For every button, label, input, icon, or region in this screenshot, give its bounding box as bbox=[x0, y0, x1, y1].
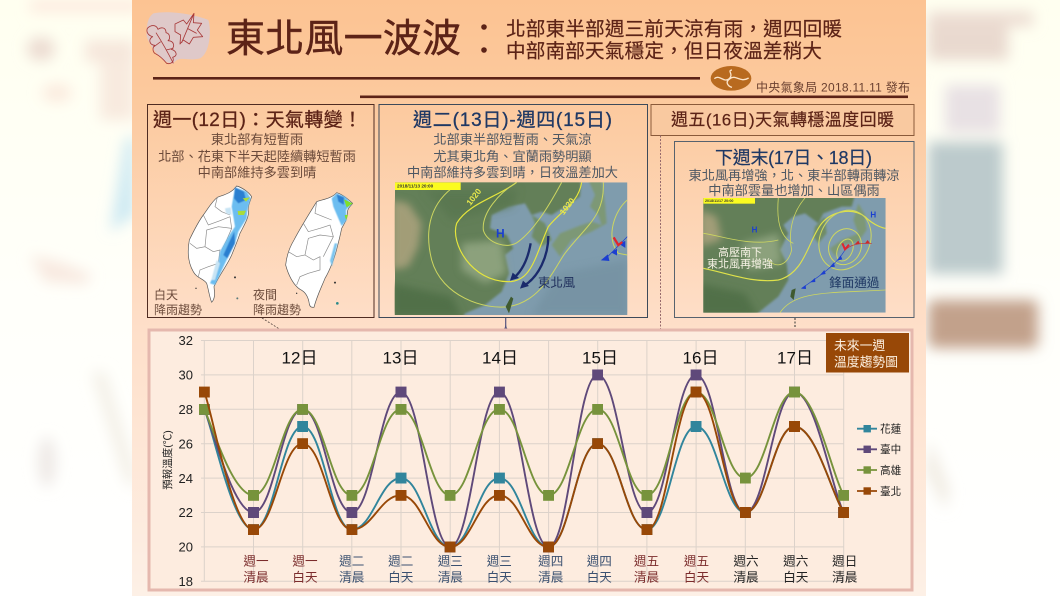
x axis labels: 清晨 bbox=[538, 570, 564, 584]
x axis labels: 清晨 bbox=[634, 570, 660, 584]
panel: next weekend bbox=[674, 142, 914, 327]
y axis labels: 28 bbox=[179, 402, 193, 417]
icon: leaves bbox=[147, 12, 210, 64]
summary bullets: 北部東半部週三前天涼有雨，週四回暖 bbox=[506, 18, 842, 40]
x axis labels: 週一 bbox=[243, 554, 269, 568]
x axis labels: 週四 bbox=[538, 554, 563, 568]
legend bbox=[857, 422, 902, 498]
x axis labels: 清晨 bbox=[733, 570, 759, 584]
x axis labels: 週五 bbox=[634, 554, 659, 568]
connector: Monday to chart bbox=[262, 318, 300, 342]
label: high pressure moving south: 高壓南下 bbox=[718, 245, 762, 259]
x axis labels: 清晨 bbox=[438, 570, 463, 584]
chart title box: 未來一週 bbox=[834, 338, 885, 353]
label: daytime rain: 降雨趨勢 bbox=[154, 302, 202, 317]
x axis labels: 白天 bbox=[487, 570, 512, 584]
heading: Monday: 週一(12日)：天氣轉變！ bbox=[153, 109, 362, 131]
x axis labels: 週日 bbox=[832, 554, 857, 568]
legend: 臺北 bbox=[880, 485, 901, 498]
legend: 高雄 bbox=[880, 464, 902, 477]
grid bbox=[201, 340, 844, 581]
date labels: 17日 bbox=[777, 348, 813, 368]
date labels: 15日 bbox=[582, 348, 618, 368]
label: night rain bbox=[253, 287, 301, 317]
chart title box bbox=[826, 333, 909, 372]
text: midweek forecast: 中南部維持多雲到晴，日夜溫差加大 bbox=[407, 165, 618, 180]
connector: Friday to chart bbox=[660, 136, 680, 358]
header rules bbox=[153, 77, 908, 98]
summary bullets: 中部南部天氣穩定，但日夜溫差稍大 bbox=[506, 40, 822, 62]
label: high pressure moving south: 東北風再增強 bbox=[707, 256, 773, 270]
text: Monday forecast: 中南部維持多雲到晴 bbox=[198, 165, 316, 180]
map: weather map Nov 13: 1020 bbox=[464, 186, 484, 207]
y axis labels: 26 bbox=[179, 436, 193, 452]
map: weather map Nov 13 bbox=[394, 182, 628, 315]
label: northeast wind: 東北風 bbox=[538, 276, 575, 290]
legend: 臺中 bbox=[880, 443, 901, 456]
map: weather map Nov 17: H bbox=[870, 210, 876, 219]
label: daytime rain: 白天 bbox=[154, 287, 178, 302]
x axis labels: 白天 bbox=[292, 570, 318, 584]
x axis labels: 週二 bbox=[388, 554, 413, 568]
x axis labels: 白天 bbox=[388, 570, 414, 584]
x axis labels: 週一 bbox=[292, 554, 318, 568]
label: front passing: 鋒面通過 bbox=[829, 275, 880, 290]
icon: weather bureau logo bbox=[711, 66, 751, 91]
y axis labels bbox=[179, 333, 193, 589]
y axis title: 預報溫度(℃) bbox=[161, 430, 174, 490]
text: midweek forecast bbox=[407, 132, 618, 180]
x axis labels: 白天 bbox=[587, 570, 612, 584]
date labels: 14日 bbox=[482, 348, 518, 368]
x axis labels: 清晨 bbox=[339, 570, 365, 584]
text: weekend forecast bbox=[688, 168, 900, 198]
legend: 花蓮 bbox=[880, 422, 902, 436]
map: weather map Nov 13: 2018/11/13 20:00 bbox=[397, 184, 434, 189]
text: Monday forecast: 東北部有短暫雨 bbox=[211, 132, 303, 147]
text: midweek forecast: 尤其東北角、宜蘭雨勢明顯 bbox=[433, 149, 592, 164]
credit: 中央氣象局 2018.11.11 發布 bbox=[756, 80, 910, 94]
heading: Tuesday to Thursday: 週二(13日)-週四(15日) bbox=[413, 109, 612, 131]
label: daytime rain bbox=[154, 287, 202, 317]
header: Friday: 週五(16日)天氣轉穩溫度回暖 bbox=[671, 110, 894, 130]
x axis labels: 白天 bbox=[783, 570, 809, 584]
y axis labels: 24 bbox=[179, 471, 193, 486]
y axis labels: 30 bbox=[179, 368, 193, 382]
map: weather map Nov 17: H bbox=[752, 225, 758, 234]
line: Hualien bbox=[204, 409, 844, 547]
x axis labels: 週六 bbox=[783, 554, 808, 568]
header: Friday bbox=[651, 104, 914, 136]
date labels: 16日 bbox=[683, 348, 718, 368]
heading: next weekend: 下週末(17日、18日) bbox=[715, 148, 872, 168]
y axis labels: 32 bbox=[179, 333, 193, 348]
page panel bbox=[132, 0, 926, 596]
x axis labels: 週五 bbox=[684, 554, 709, 568]
date labels: 12日 bbox=[282, 348, 317, 368]
map: weather map Nov 13: H bbox=[496, 227, 505, 241]
map: daytime rain over Taiwan bbox=[188, 186, 252, 302]
line: Taichung bbox=[204, 375, 844, 547]
date labels: 13日 bbox=[383, 348, 418, 368]
text: weekend forecast: 中南部雲量也增加、山區偶雨 bbox=[708, 183, 880, 198]
line: Kaohsiung bbox=[204, 392, 844, 495]
y axis labels: 18 bbox=[179, 574, 193, 589]
y axis labels: 22 bbox=[179, 505, 193, 520]
connector: midweek bracket bbox=[385, 318, 626, 341]
text: midweek forecast: 北部東半部短暫雨、天氣涼 bbox=[433, 132, 592, 147]
panel: temperature chart bbox=[149, 330, 912, 590]
label: high pressure moving south bbox=[707, 245, 773, 270]
x axis labels: 週三 bbox=[487, 554, 512, 568]
title: 東北風一波波 bbox=[226, 18, 461, 61]
line: Taipei bbox=[204, 392, 844, 547]
x axis labels: 清晨 bbox=[832, 570, 858, 584]
panel: Monday bbox=[148, 104, 374, 318]
text: Monday forecast bbox=[158, 132, 356, 180]
map: night rain over Taiwan bbox=[286, 193, 353, 307]
x axis labels: 白天 bbox=[684, 570, 710, 584]
x axis labels: 週四 bbox=[587, 554, 612, 568]
label: night rain: 降雨趨勢 bbox=[253, 302, 301, 317]
x axis labels: 週二 bbox=[339, 554, 364, 568]
x axis labels: 清晨 bbox=[243, 570, 269, 584]
y axis labels: 20 bbox=[179, 540, 193, 554]
x axis labels: 週六 bbox=[733, 554, 759, 568]
connector: weekend to chart bbox=[794, 318, 796, 342]
summary bullets bbox=[481, 18, 842, 62]
map: weather map Nov 13: 1020 bbox=[557, 196, 577, 217]
chart title box: 溫度趨勢圖 bbox=[834, 354, 898, 370]
x axis labels: 週三 bbox=[438, 554, 463, 568]
map: weather map Nov 17 bbox=[703, 198, 886, 313]
text: Monday forecast: 北部、花東下半天起陸續轉短暫雨 bbox=[158, 149, 356, 164]
panel: Tuesday to Thursday bbox=[379, 104, 648, 333]
map: weather map Nov 17: 2018/11/17 20:00 bbox=[705, 199, 733, 203]
label: night rain: 夜間 bbox=[253, 287, 277, 302]
x axis labels bbox=[243, 554, 858, 584]
text: weekend forecast: 東北風再增強，北、東半部轉雨轉涼 bbox=[688, 168, 900, 183]
date labels bbox=[282, 348, 813, 368]
